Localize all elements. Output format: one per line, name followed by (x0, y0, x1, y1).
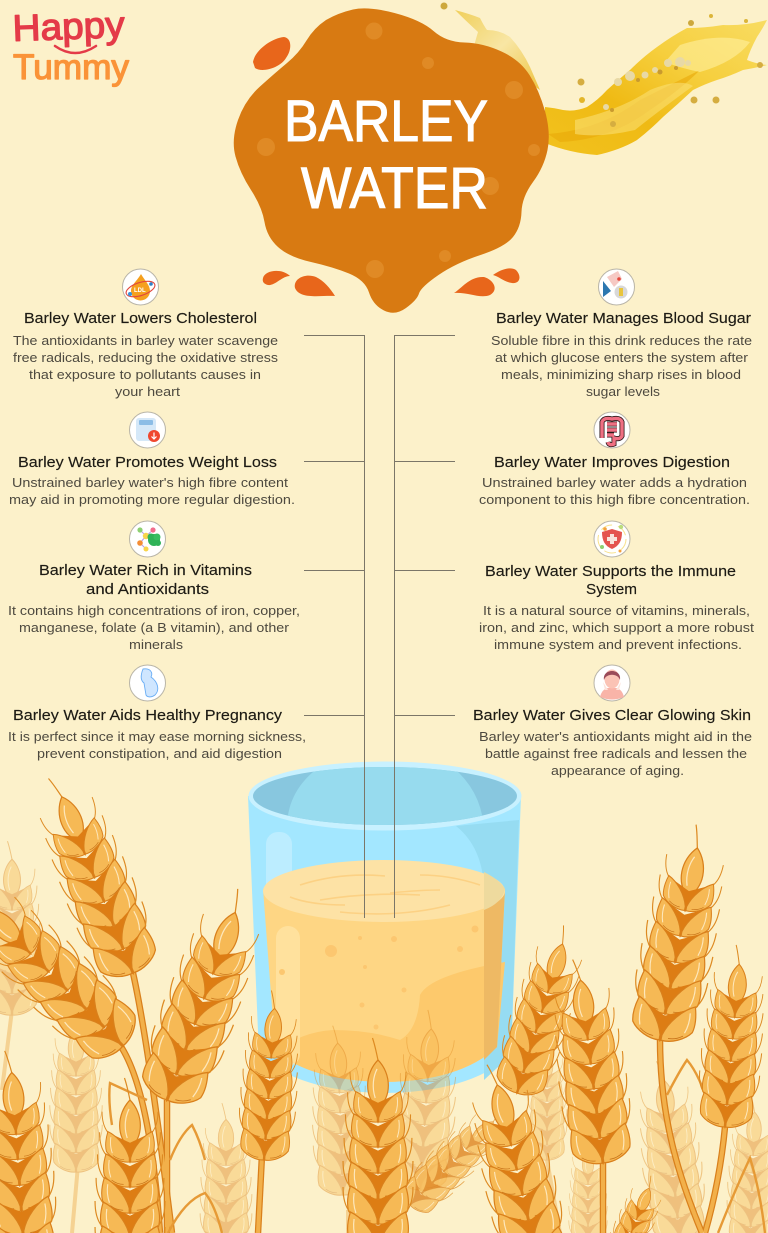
heading: Barley Water Improves Digestion (494, 454, 730, 471)
body text: minerals (129, 637, 184, 652)
body text (9, 475, 295, 507)
body text: your heart (115, 384, 180, 399)
heading: and Antioxidants (86, 581, 209, 598)
logo: Happy Tummy: Happy (12, 4, 126, 49)
wheat stems and leaves (109, 973, 765, 1233)
body text (479, 475, 750, 507)
body text: The antioxidants in barley water scavenge (13, 333, 278, 348)
foreground wheat ears (0, 763, 768, 1233)
body text: may aid in promoting more regular digestion. (9, 492, 295, 507)
icon: golden liquid splash (440, 2, 767, 155)
heading: System (586, 581, 637, 598)
splash drops (253, 37, 519, 296)
connector lines (304, 336, 455, 918)
icon: intestines (594, 412, 630, 448)
heading: Barley Water Promotes Weight Loss (18, 454, 277, 471)
icon: face (594, 665, 630, 701)
logo: Happy Tummy: Tummy (13, 48, 129, 87)
heading (39, 562, 252, 598)
heading: Barley Water Supports the Immune (485, 563, 736, 580)
body text (479, 729, 752, 778)
heading: Barley Water Manages Blood Sugar (496, 310, 751, 327)
body text: It contains high concentrations of iron, copper, (8, 603, 300, 618)
body text: iron, and zinc, which support a more robust (479, 620, 754, 635)
title: BARLEY (284, 89, 488, 154)
panel: lowers cholesterol (13, 269, 279, 399)
icon: LDL drop (122, 269, 158, 305)
body text: manganese, folate (a B vitamin), and other (19, 620, 290, 635)
body text: component to this high fibre concentration. (479, 492, 750, 507)
heading: Barley Water Gives Clear Glowing Skin (473, 707, 751, 724)
body text: battle against free radicals and lessen the (485, 746, 747, 761)
glass body (248, 796, 521, 1093)
left small tilted ear (394, 1097, 518, 1221)
icon: shield (594, 521, 630, 557)
body text (491, 333, 752, 399)
title: WATER (301, 156, 488, 221)
body text: free radicals, reducing the oxidative stress (13, 350, 279, 365)
body text: immune system and prevent infections. (494, 637, 742, 652)
body text: that exposure to pollutants causes in (29, 367, 261, 382)
body text: appearance of aging. (551, 763, 684, 778)
heading (485, 563, 736, 598)
body text (479, 603, 754, 652)
panel: weight loss (9, 412, 295, 507)
icon: LDL drop: LDL (134, 288, 146, 294)
barley drink (263, 889, 505, 1082)
body text: Unstrained barley water adds a hydration (482, 475, 747, 490)
body text: at which glucose enters the system after (495, 350, 749, 365)
body text (8, 729, 306, 761)
heading: Barley Water Rich in Vitamins (39, 562, 252, 579)
body text: Barley water's antioxidants might aid in the (479, 729, 752, 744)
body text: sugar levels (586, 384, 661, 399)
icon: glucose test (598, 269, 634, 305)
panel: supports immune system (479, 521, 754, 652)
logo: Happy Tummy (12, 4, 129, 87)
title (284, 89, 488, 221)
body text: meals, minimizing sharp rises in blood (501, 367, 741, 382)
body text (13, 333, 279, 399)
heading: Barley Water Lowers Cholesterol (24, 310, 257, 327)
icon: molecules (130, 521, 166, 557)
body text: Soluble fibre in this drink reduces the rate (491, 333, 752, 348)
glass of barley water (248, 762, 522, 1093)
faded background wheat (0, 841, 768, 1233)
panel: vitamins and antioxidants (8, 521, 300, 652)
body text: It is perfect since it may ease morning sickness, (8, 729, 306, 744)
panel: clear glowing skin (473, 665, 752, 778)
body text: It is a natural source of vitamins, minerals, (483, 603, 750, 618)
icon: weighing scale (130, 412, 166, 448)
panel: healthy pregnancy (8, 665, 306, 761)
body text: prevent constipation, and aid digestion (37, 746, 282, 761)
body text: Unstrained barley water's high fibre content (12, 475, 288, 490)
icon: pregnant body (130, 665, 166, 701)
title blob (234, 8, 549, 313)
heading: Barley Water Aids Healthy Pregnancy (13, 707, 283, 724)
body text (8, 603, 300, 652)
glass rim (248, 762, 522, 830)
panel: improves digestion (479, 412, 750, 507)
panel: manages blood sugar (491, 269, 752, 399)
